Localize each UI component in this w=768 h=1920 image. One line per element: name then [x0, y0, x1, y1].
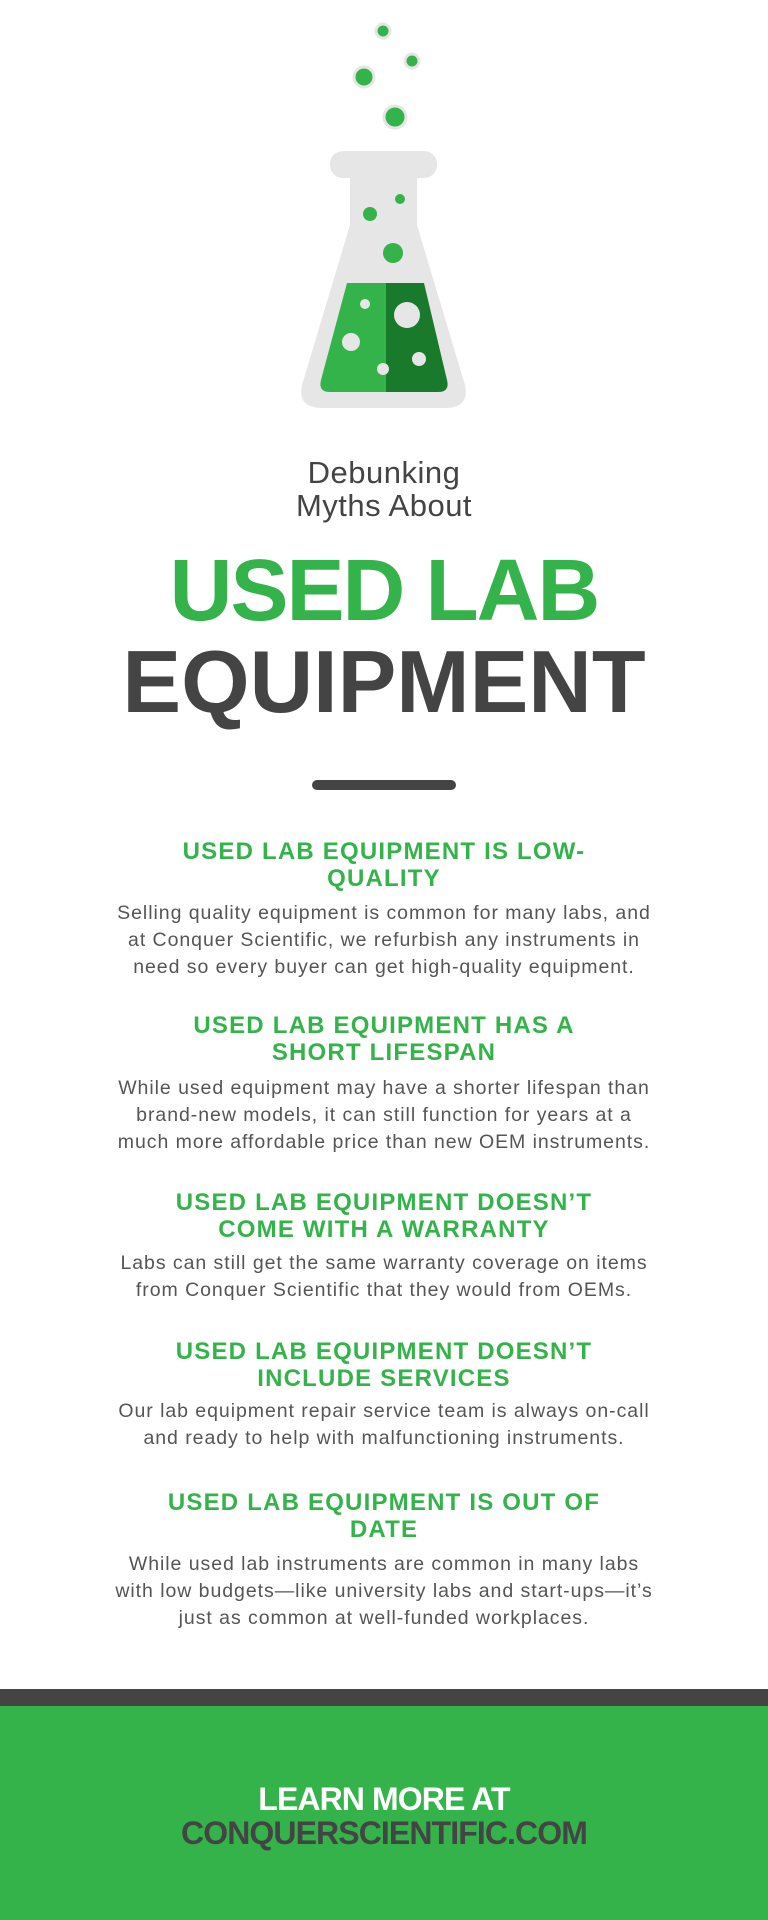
title: debunking myths about: [296, 455, 472, 523]
myth 1 text: need so every buyer can get high-quality equipment.: [133, 956, 635, 978]
myth 1 heading: QUALITY: [327, 865, 441, 892]
myth 3 text: [120, 1252, 648, 1301]
myth 2 heading: [193, 1012, 575, 1066]
myth 1 text: [117, 902, 651, 978]
footer text: LEARN MORE AT: [258, 1781, 510, 1817]
myth 2 text: much more affordable price than new OEM instruments.: [118, 1131, 650, 1153]
myth 3 heading: COME WITH A WARRANTY: [218, 1216, 550, 1243]
myth 1 heading: USED LAB EQUIPMENT IS LOW-: [183, 838, 585, 865]
myth 4 text: [118, 1400, 650, 1449]
myth 2 heading: SHORT LIFESPAN: [272, 1039, 496, 1066]
footer dark band: [0, 1689, 768, 1706]
myth 4 heading: USED LAB EQUIPMENT DOESN’T: [176, 1338, 592, 1365]
divider bar: [312, 780, 456, 790]
myth 1 heading: [183, 838, 585, 892]
title: used lab: USED LAB: [170, 542, 598, 639]
myth 1 text: at Conquer Scientific, we refurbish any instruments in: [128, 929, 640, 951]
myth 5 heading: USED LAB EQUIPMENT IS OUT OF: [168, 1489, 600, 1516]
myth 4 heading: INCLUDE SERVICES: [257, 1365, 511, 1392]
myth 5 text: with low budgets—like university labs and start-ups—it’s: [115, 1580, 653, 1602]
footer panel: [0, 1706, 768, 1920]
myth 3 heading: [176, 1189, 592, 1243]
myth 4 heading: [176, 1338, 592, 1392]
myth 3 heading: USED LAB EQUIPMENT DOESN’T: [176, 1189, 592, 1216]
myth 2 text: brand-new models, it can still function for years at a: [136, 1104, 632, 1126]
myth 3 text: from Conquer Scientific that they would from OEMs.: [136, 1279, 632, 1301]
myth 3 text: Labs can still get the same warranty coverage on items: [120, 1252, 648, 1274]
footer text: CONQUERSCIENTIFIC.COM: [181, 1815, 587, 1851]
footer text: [181, 1781, 587, 1851]
myth 2 text: While used equipment may have a shorter lifespan than: [118, 1077, 650, 1099]
myth 5 text: just as common at well-funded workplaces.: [179, 1607, 589, 1629]
myth 4 text: and ready to help with malfunctioning instruments.: [143, 1427, 625, 1449]
title: debunking myths about: Myths About: [296, 488, 472, 523]
title: debunking myths about: Debunking: [308, 455, 460, 490]
myth 1 text: Selling quality equipment is common for many labs, and: [117, 902, 651, 924]
title: equipment: EQUIPMENT: [122, 632, 646, 731]
icon: flask with bubbles: [301, 22, 466, 408]
myth 5 heading: [168, 1489, 600, 1543]
myth 4 text: Our lab equipment repair service team is always on-call: [118, 1400, 650, 1422]
myth 5 text: [115, 1553, 653, 1629]
myth 2 heading: USED LAB EQUIPMENT HAS A: [193, 1012, 575, 1039]
myth 2 text: [118, 1077, 650, 1153]
myth 5 heading: DATE: [350, 1516, 418, 1543]
myth 5 text: While used lab instruments are common in many labs: [129, 1553, 639, 1575]
